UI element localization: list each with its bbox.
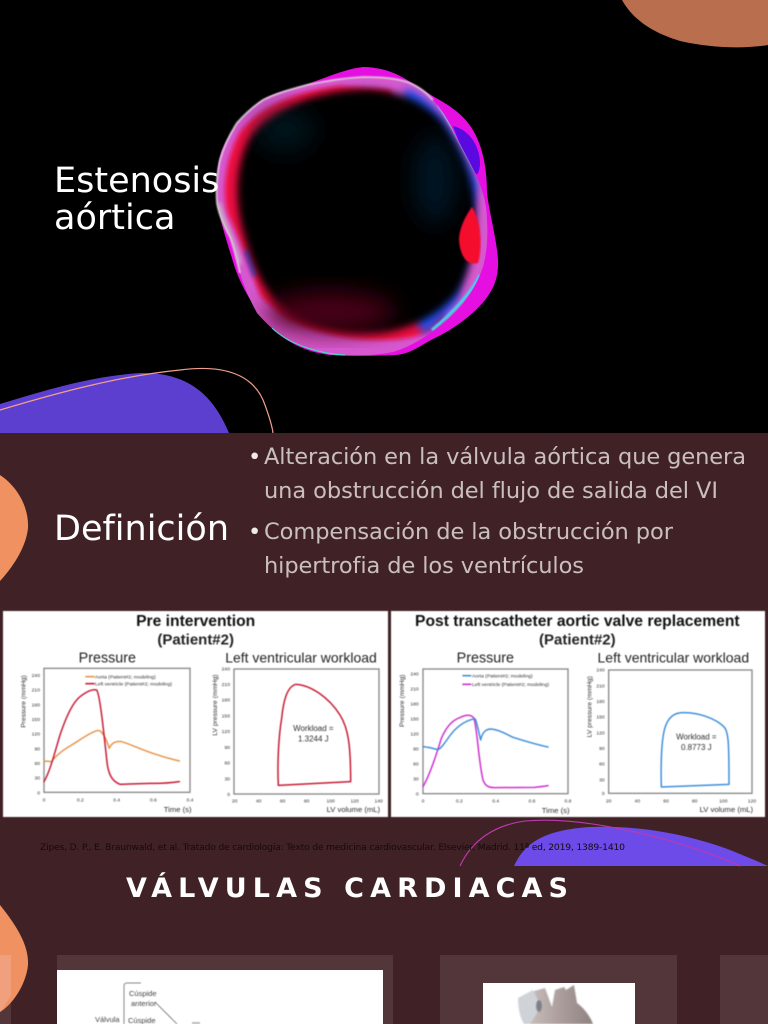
chart image: post transcatheter: 60 [413, 762, 419, 768]
chart image: post transcatheter: Left ventricular workload [598, 649, 749, 665]
decorative purple shape, bottom left of top slide [0, 373, 229, 433]
title: aórtica [54, 198, 175, 238]
blue glow lower left [246, 250, 255, 276]
definition bullets: Alteración en la válvula aórtica que genera [264, 444, 746, 470]
chart image: pre intervention: 100 [326, 798, 335, 804]
chart image: pre intervention: 150 [32, 717, 40, 723]
chart image: pre intervention: 180 [222, 698, 230, 704]
chart image: post transcatheter: 0 [422, 798, 425, 804]
chart image: post transcatheter: 40 [635, 798, 640, 804]
chart image: pre intervention: 90 [34, 746, 40, 752]
pressure plot [44, 668, 190, 792]
chart image: pre intervention: 0.4 [187, 797, 194, 803]
chart image: pre intervention: Left ventricle (Patient#2; modeling) [95, 681, 172, 687]
chart image: pre intervention: 180 [32, 702, 40, 708]
chart image: post transcatheter: 60 [663, 798, 669, 804]
dark centre [237, 89, 475, 333]
cyan streak lower right [432, 275, 480, 330]
chart image: pre intervention: Time (s) [164, 805, 192, 814]
chart image: pre intervention: Workload = [293, 724, 334, 733]
chart image: post transcatheter: 0.8773 J [681, 743, 712, 752]
decorative magenta curve [460, 820, 740, 866]
navy haze [413, 135, 457, 225]
aortic glow blob [217, 67, 498, 356]
icon: heart [518, 985, 593, 1024]
chart image: post transcatheter: 0.4 [492, 798, 499, 804]
title: Estenosis [54, 161, 219, 201]
chart image: post transcatheter: 90 [599, 746, 605, 752]
chart image: pre intervention: Aorta (Patient#2; modeling) [95, 674, 156, 680]
chart image: pre intervention: 30 [34, 776, 40, 782]
chart image: pre intervention: LV pressure (mmHg) [212, 674, 219, 736]
chart image: pre intervention: 140 [374, 798, 383, 804]
chart image: post transcatheter: 0.6 [529, 798, 536, 804]
chart image: post transcatheter: LV volume (mL) [700, 805, 754, 814]
blue-violet patch on right edge [453, 126, 480, 174]
chart image: pre intervention: 40 [256, 798, 262, 804]
chart image: pre intervention: Pressure [79, 650, 136, 666]
panel: valve diagram [57, 955, 393, 1024]
workload plot [234, 669, 379, 794]
chart image: pre intervention: 120 [32, 732, 40, 738]
chart image: post transcatheter: Left ventricle (Patient#2; modeling) [472, 682, 549, 688]
decorative orange shape, left [0, 475, 28, 581]
chart image: post transcatheter: 30 [599, 777, 605, 783]
panel: heart illustration [440, 955, 677, 1024]
pale outline [217, 77, 433, 273]
chart image: pre intervention [3, 611, 388, 817]
side panel right edge [720, 955, 768, 1024]
chart image: post transcatheter: 240 [596, 668, 605, 674]
workload plot [609, 670, 752, 793]
chart image: post transcatheter: Workload = [676, 732, 717, 741]
definition bullets: una obstrucción del flujo de salida del VI [264, 478, 718, 504]
chart image: pre intervention: 240 [32, 673, 40, 679]
definition bullets: Compensación de la obstrucción por [264, 519, 674, 545]
chart image: pre intervention: 120 [350, 798, 359, 804]
chart image: post transcatheter: Post transcatheter aortic valve replacement [415, 613, 740, 630]
chart image: pre intervention: 0 [227, 792, 230, 798]
chart image: post transcatheter [391, 611, 765, 817]
chart image: post transcatheter: Aorta (Patient#2; modeling) [472, 673, 533, 679]
valve diagram labels: Válvula [95, 1015, 120, 1024]
cyan streak upper right [438, 105, 476, 172]
chart image: post transcatheter: 100 [719, 798, 728, 804]
definition bullets: • [248, 444, 261, 470]
chart image: post transcatheter: Pressure [457, 650, 514, 666]
chart image: pre intervention: 80 [304, 798, 310, 804]
decorative pink curve [0, 368, 273, 433]
pressure plot [423, 669, 568, 794]
chart image: pre intervention: 120 [222, 729, 230, 735]
decorative orange shape, top right [622, 0, 768, 47]
blue glow right edge [400, 88, 478, 335]
chart image: pre intervention: (Patient#2) [157, 632, 234, 649]
definition bullets: • [248, 519, 261, 545]
decorative orange shape, lower left [0, 905, 28, 1012]
chart image: pre intervention: 20 [232, 798, 238, 804]
top slide background [0, 0, 768, 433]
chart image: pre intervention: 210 [32, 688, 40, 694]
chart image: pre intervention: LV volume (mL) [327, 805, 381, 814]
pale left rim [217, 203, 238, 265]
chart image: pre intervention: 0.6 [150, 797, 157, 803]
chart image: pre intervention: 0.4 [113, 797, 120, 803]
chart image: post transcatheter: 150 [410, 717, 419, 723]
chart image: post transcatheter: 150 [596, 715, 605, 721]
decorative purple shape, middle right [514, 827, 768, 866]
definition bullets [248, 444, 746, 579]
chart image: post transcatheter: 20 [606, 798, 612, 804]
chart image: pre intervention: Pre intervention [136, 613, 255, 630]
chart image: pre intervention: Pressure (mmHg) [21, 675, 28, 728]
definition bullets: hipertrofia de los ventrículos [264, 553, 584, 579]
valve diagram labels [95, 983, 200, 1024]
valve diagram labels: Cúspide [129, 989, 157, 998]
chart image: post transcatheter: 80 [692, 798, 698, 804]
chart image: pre intervention: 210 [222, 682, 230, 688]
chart image: post transcatheter: 0.8 [565, 798, 572, 804]
chart image: pre intervention: 240 [222, 666, 230, 672]
chart image: pre intervention: 0.2 [77, 797, 84, 803]
chart image: pre intervention: 1.3244 J [298, 735, 329, 744]
chart image: post transcatheter: 0 [602, 791, 605, 797]
chart image: post transcatheter: 120 [748, 798, 756, 804]
chart image: post transcatheter: (Patient#2) [539, 632, 616, 649]
chart image: pre intervention: 0 [43, 797, 46, 803]
chart image: post transcatheter: 60 [599, 762, 605, 768]
chart image: pre intervention: 30 [224, 776, 230, 782]
chart image: post transcatheter: 180 [596, 699, 605, 705]
chart image: pre intervention: 60 [34, 761, 40, 767]
chart image: post transcatheter: Pressure (mmHg) [399, 674, 406, 727]
heading: definición: Definición [54, 509, 229, 549]
chart image: pre intervention: Left ventricular workload [225, 649, 377, 665]
chart image: post transcatheter: 180 [410, 702, 419, 708]
chart image: post transcatheter: LV pressure (mmHg) [586, 676, 593, 737]
chart image: post transcatheter: 30 [413, 777, 419, 783]
chart image: pre intervention: 90 [224, 745, 230, 751]
inner shell [217, 77, 487, 356]
chart image: post transcatheter: 0 [416, 792, 419, 798]
chart image: pre intervention: 60 [280, 798, 286, 804]
chart image: pre intervention: 0 [37, 790, 40, 796]
source citation: Zipes, D. P., E. Braunwald, et al. Tratado de cardiología: Texto de medicina cardiovascular. Elsevier. Madrid. 11ª ed, 2019, 1389-1410 [40, 842, 625, 853]
chart image: post transcatheter: 120 [410, 732, 419, 738]
chart image: post transcatheter: 210 [410, 687, 419, 693]
chart image: post transcatheter: Time (s) [542, 806, 570, 815]
definition slide background [0, 433, 768, 1024]
red hot spot [459, 207, 480, 263]
chart image: post transcatheter: 0.2 [456, 798, 463, 804]
red glow band [225, 86, 445, 340]
cyan bottom rim [272, 328, 345, 355]
chart image: post transcatheter: 240 [410, 672, 419, 678]
valve diagram labels: anterior [131, 999, 157, 1008]
chart image: post transcatheter: 210 [596, 683, 605, 689]
chart image: post transcatheter: 90 [413, 747, 419, 753]
heading: válvulas cardiacas: VÁLVULAS CARDIACAS [126, 872, 568, 904]
chart image: pre intervention: 60 [224, 761, 230, 767]
side panel left edge [0, 955, 11, 1024]
chart image: pre intervention: 150 [222, 713, 230, 719]
chart image: post transcatheter: 120 [596, 730, 605, 736]
dark red haze [265, 292, 395, 332]
